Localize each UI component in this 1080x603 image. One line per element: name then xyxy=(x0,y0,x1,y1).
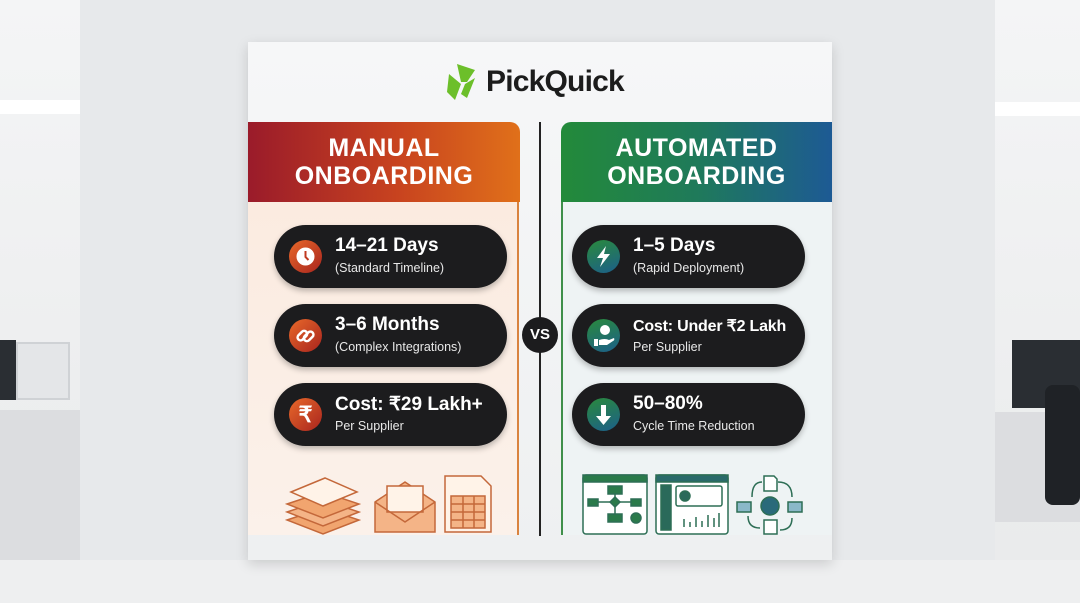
heading: automated onboarding: AUTOMATED xyxy=(616,134,777,162)
pill: 3-6 months: 3–6 Months xyxy=(335,314,440,335)
VS badge xyxy=(522,317,558,353)
heading: manual onboarding: MANUAL xyxy=(328,134,440,162)
pill: cost 29 lakh: Per Supplier xyxy=(335,419,404,433)
pill: 1-5 days: (Rapid Deployment) xyxy=(633,261,744,275)
pill: cost 29 lakh: Cost: ₹29 Lakh+ xyxy=(335,394,483,415)
pill: cost 29 lakh: ₹ xyxy=(298,402,312,427)
VS badge: VS xyxy=(530,326,550,343)
icons: automated software xyxy=(582,474,803,535)
pill: 50-80% xyxy=(572,383,805,446)
pill: 14-21 days: (Standard Timeline) xyxy=(335,261,444,275)
pill: 50-80%: 50–80% xyxy=(633,393,703,414)
pill: cost under 2 lakh xyxy=(572,304,805,367)
left panel background xyxy=(248,202,519,535)
logo text: PickQuick xyxy=(486,65,624,98)
pill: 1-5 days: 1–5 Days xyxy=(633,235,715,256)
pill: cost under 2 lakh: Cost: Under ₹2 Lakh xyxy=(633,318,786,335)
icons: manual documents xyxy=(285,475,492,535)
board xyxy=(248,42,832,560)
pill: cost 29 lakh xyxy=(274,383,507,446)
pill: 50-80%: Cycle Time Reduction xyxy=(633,419,755,433)
right panel background xyxy=(561,202,832,535)
pill: 14-21 days: 14–21 Days xyxy=(335,235,439,256)
heading: manual onboarding: ONBOARDING xyxy=(295,162,473,190)
heading: manual onboarding xyxy=(248,122,520,202)
icon: logo bolt xyxy=(447,64,475,100)
pill: 3-6 months xyxy=(274,304,507,367)
logo xyxy=(447,64,625,100)
pill: 3-6 months: (Complex Integrations) xyxy=(335,340,461,354)
heading: automated onboarding xyxy=(561,122,832,202)
divider line xyxy=(539,122,541,536)
pill: 14-21 days xyxy=(274,225,507,288)
pill: 1-5 days xyxy=(572,225,805,288)
pill: cost under 2 lakh: Per Supplier xyxy=(633,340,702,354)
heading: automated onboarding: ONBOARDING xyxy=(607,162,786,190)
